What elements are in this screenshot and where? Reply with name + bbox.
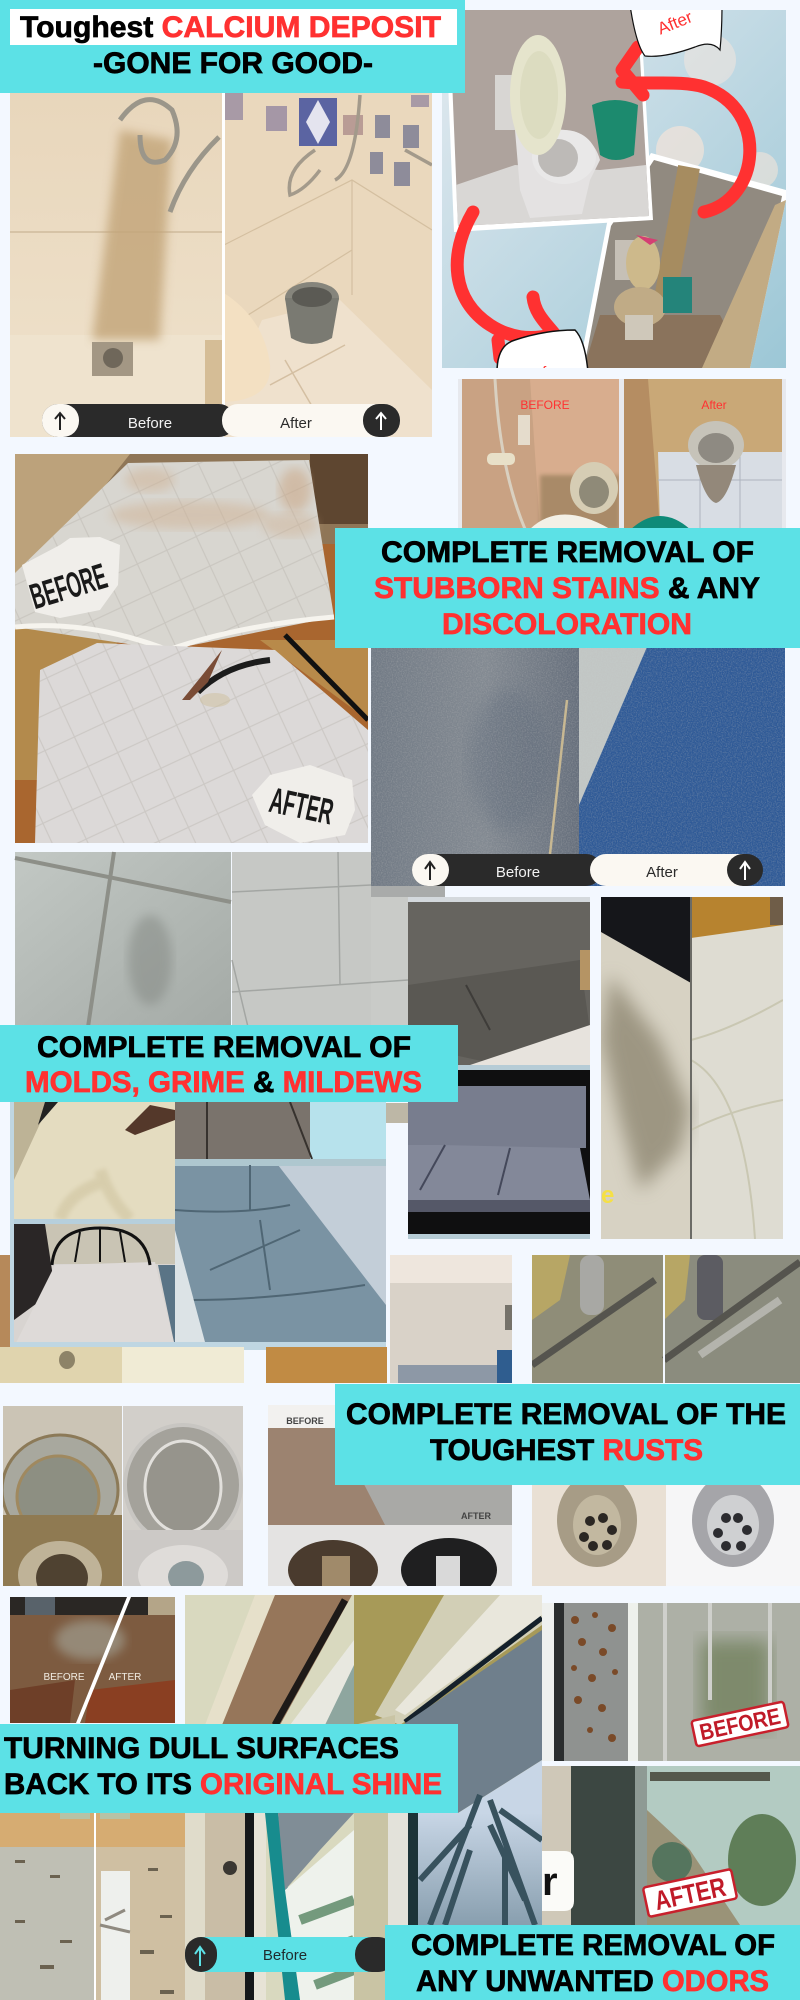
after side: After [701,398,727,412]
sticker: before [496,329,588,368]
sticker: after [630,5,722,56]
comparison pill: window [185,1937,395,1972]
sticker: before: BEFORE [25,556,112,618]
photo: mattress cleaning before [14,1102,175,1219]
title banner: -GONE FOR GOOD- [93,47,373,80]
photo frame strip [10,1102,386,1350]
banner: unwanted odors: ANY UNWANTED ODORS [416,1965,769,1998]
drain after [692,1485,774,1567]
shower before [10,80,222,437]
photo: shower before and after [10,80,432,437]
sticker: before [22,537,120,618]
label: after: AFTER [461,1511,491,1521]
photo: rusty pipe before and after [268,1405,512,1602]
label: before: BEFORE [43,1672,85,1683]
photo: bathtub before [0,1255,244,1383]
banner: molds, grime and mildews: MOLDS, GRIME & MILDEWS [25,1066,422,1099]
bucket [285,282,339,344]
photo frame strip [10,1219,175,1224]
banner: toughest rusts [335,1384,800,1485]
photo: clean window after [542,1766,800,1925]
before side [462,379,620,530]
banner: stubborn stains: COMPLETE REMOVAL OF [381,536,754,569]
sticker: before: fore [542,364,568,381]
comparison pill: shower: After [280,415,312,432]
sticker: after: AFTER [266,781,337,833]
lower photo: dirty toilet [579,153,786,368]
banner: stubborn stains [335,528,800,648]
photo: rusty window before [542,1603,800,1761]
after side [624,379,782,532]
sticker: after [252,765,355,843]
comparison pill: shower [42,404,400,437]
sticker: after: After [655,7,695,38]
shower after [224,80,432,437]
photo: sofa cleaning after [175,1159,386,1342]
photo: window frame before and after [185,1595,542,2000]
photo: tile before and after [15,852,445,1027]
photo: wood floor before and after [10,1597,175,1723]
stamp: before: BEFORE [697,1703,783,1745]
comparison pill: carpet: After [646,864,678,881]
clean mattress [35,643,368,843]
photo: carpet before and after [371,640,785,886]
drain before [557,1485,637,1567]
comparison pill: carpet: Before [496,864,540,881]
comparison pill: shower: Before [128,415,172,432]
title banner: Toughest CALCIUM DEPOSIT [20,11,441,44]
photo: toilet seat after [123,1406,243,1605]
white sticker with partial letter: r [542,1860,558,1904]
label: before: BEFORE [286,1416,324,1426]
photo collage: toilet before and after [442,5,786,381]
comparison pill: window: Before [263,1947,307,1964]
photo: small bathroom before and after [458,379,786,532]
photo: toilet seat before [3,1406,122,1586]
partial yellow letter: e [601,1182,614,1209]
stained mattress [15,460,334,650]
banner: unwanted odors [385,1925,800,2000]
photo: bathtub after [390,1255,512,1383]
banner: stubborn stains: STUBBORN STAINS & ANY [374,572,760,605]
banner: toughest rusts: COMPLETE REMOVAL OF THE [346,1398,786,1431]
red arrow to before [457,212,556,358]
banner: original shine: BACK TO ITS ORIGINAL SHINE [4,1768,442,1801]
photo: sofa cleaning before [175,1102,386,1159]
photo: rusty tub before [266,1347,387,1383]
label: after: AFTER [109,1672,141,1683]
photo: sofa after [408,1065,590,1239]
photo: faucet before and after [532,1255,800,1383]
banner: original shine: TURNING DULL SURFACES [4,1732,399,1765]
before side: BEFORE [520,398,570,412]
comparison pill: carpet [412,854,763,886]
white sticker with partial letter [542,1851,574,1911]
banner: original shine [0,1724,458,1813]
title banner [0,0,465,93]
stamp: after: AFTER [652,1872,729,1916]
photo: tile floor before and after [0,1813,185,2000]
red arrow to after [622,47,750,212]
photo: mattress before and after [15,454,368,843]
photo: sofa before [408,897,590,1065]
photo: drain before and after [532,1485,774,1586]
upper photo: clean toilet [445,5,653,232]
banner: molds, grime and mildews [0,1025,458,1102]
photo: mattress cleaning after [14,1224,175,1347]
photo: moldy mattress before and after [601,897,783,1239]
banner: stubborn stains: DISCOLORATION [442,608,692,641]
lower left window [185,1813,354,2000]
lower right window [354,1795,542,2000]
banner: molds, grime and mildews: COMPLETE REMOVAL OF [37,1031,411,1064]
banner: unwanted odors: COMPLETE REMOVAL OF [411,1929,775,1962]
banner: toughest rusts: TOUGHEST RUSTS [430,1434,703,1467]
small tile peek [386,1103,408,1123]
